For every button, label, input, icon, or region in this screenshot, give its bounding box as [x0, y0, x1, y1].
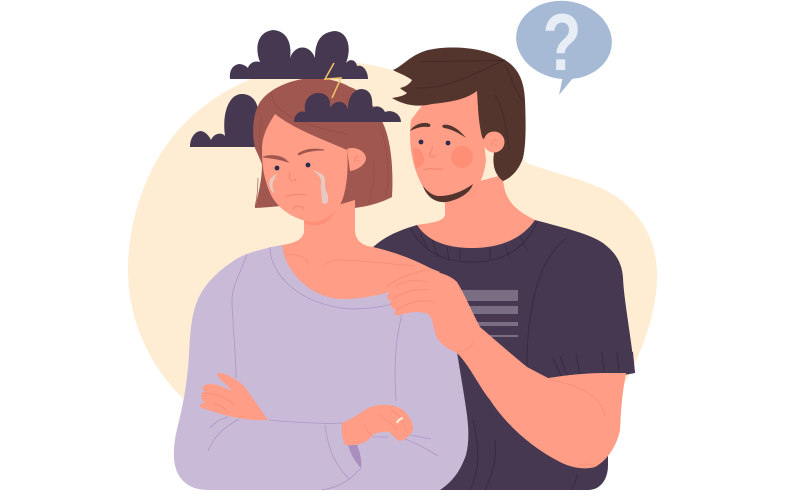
woman: eyes — [275, 163, 310, 170]
woman: body sweater — [174, 245, 468, 490]
man: hair — [392, 47, 526, 181]
woman: right hand — [342, 405, 413, 445]
man: sleeve cuff — [532, 352, 635, 378]
woman: hair strands — [255, 92, 388, 207]
lightning bolt — [325, 63, 341, 98]
shirt collar ribs — [411, 222, 537, 262]
woman: sweater seams — [208, 247, 438, 490]
woman: ear — [347, 148, 366, 171]
woman: neck shadow — [304, 205, 338, 225]
man: nose and mouth — [423, 146, 443, 170]
hand finger lines — [387, 270, 605, 467]
woman: sweater fold — [348, 445, 361, 468]
man: cheek — [451, 146, 473, 168]
man: neck — [417, 175, 535, 248]
man: eyebrows — [410, 123, 466, 138]
cloud: on head — [294, 89, 401, 122]
man: cheek left — [413, 148, 424, 168]
woman: left hand — [200, 373, 268, 420]
man: head — [410, 85, 486, 203]
woman: face — [262, 114, 348, 222]
ring — [397, 418, 403, 423]
man: chin shadow — [445, 176, 482, 203]
background blob — [128, 63, 657, 440]
man: t-shirt — [372, 220, 635, 490]
man: eyes — [419, 140, 450, 145]
question mark: ? — [542, 0, 582, 88]
shirt stripes — [455, 290, 518, 337]
woman: eyebrows — [263, 149, 324, 162]
cloud: behind head — [190, 94, 265, 147]
man: beard — [423, 184, 473, 202]
speech bubble — [511, 0, 617, 95]
man: ear — [484, 132, 504, 152]
woman: neck and shoulder — [282, 200, 440, 299]
cloud: top — [230, 30, 368, 79]
man: arm and hand — [386, 269, 626, 468]
man: hair strands — [415, 60, 522, 150]
shirt seams — [470, 238, 577, 490]
woman: nose and mouth — [285, 172, 306, 209]
woman: hair back — [253, 78, 392, 209]
woman: collarbones — [284, 254, 415, 266]
woman: tears — [269, 170, 328, 204]
